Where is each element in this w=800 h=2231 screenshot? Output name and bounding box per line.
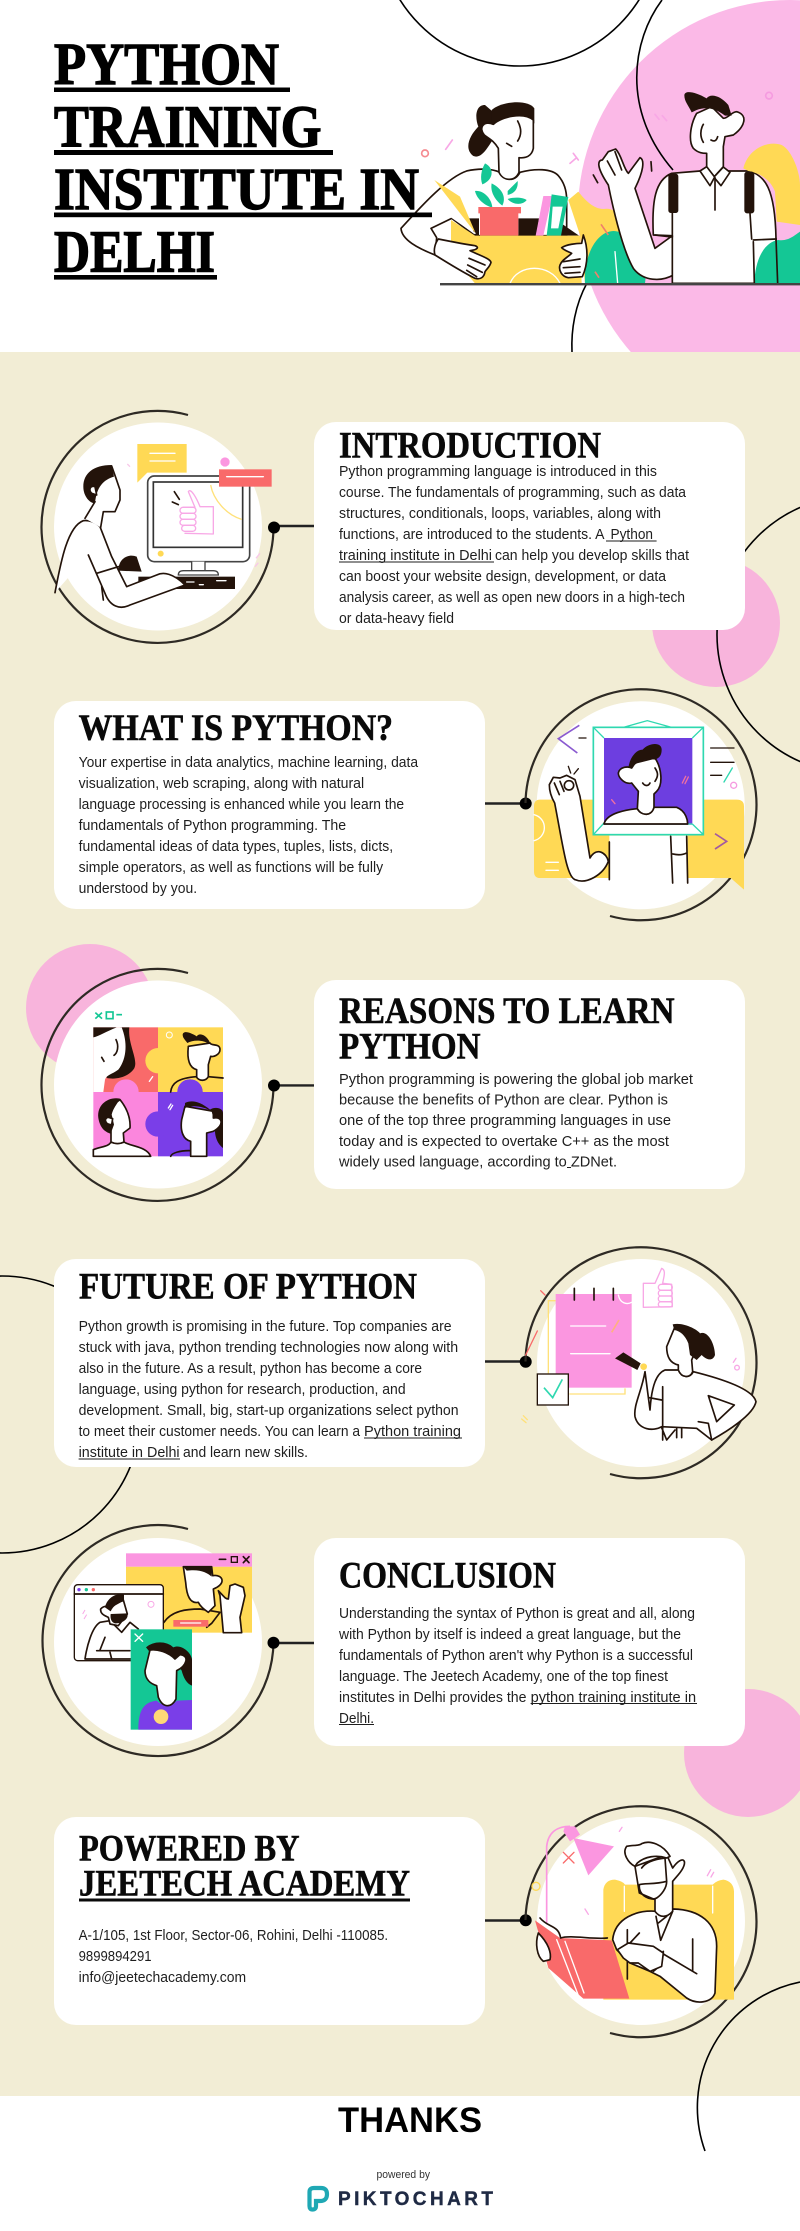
- body text: conclusion: python training institute in: [531, 1689, 696, 1706]
- yellow speech bubble: [534, 800, 744, 890]
- floor lamp: [547, 1826, 614, 1923]
- chevrons: [558, 725, 579, 753]
- body text: reasons: because the benefits of Python are clear. Python is: [339, 1092, 668, 1109]
- body text: reasons: [338, 1071, 694, 1170]
- picture frame: [593, 721, 703, 835]
- green video card: [131, 1629, 192, 1730]
- man hair: [628, 744, 662, 768]
- hand and pen: [617, 1943, 663, 1971]
- body text: future: Python growth is promising in the future. Top companies are: [79, 1318, 452, 1335]
- alert tag: [219, 469, 272, 487]
- video call drawing: [74, 1553, 252, 1730]
- contact details: [79, 1927, 388, 1986]
- face bottom left: [93, 1098, 151, 1156]
- body text: future: Python training: [364, 1423, 461, 1440]
- left hand: [537, 1933, 550, 1961]
- body text: conclusion: with Python by itself is indeed a great language, but the: [338, 1626, 681, 1643]
- body text: reasons: one of the top three programming languages in use: [339, 1112, 671, 1129]
- woman with notepad drawing: [522, 1268, 756, 1440]
- body text: future: also in the future. As a result, python has become a core: [79, 1360, 422, 1377]
- man torso: [653, 171, 778, 283]
- section: powered by: [54, 1806, 756, 2037]
- illustration circle: man reading in chair: [526, 1806, 756, 2037]
- card: conclusion: [314, 1538, 745, 1746]
- body text: what is python: visualization, web scraping, along with natural: [79, 775, 364, 792]
- body text: conclusion: Delhi.: [339, 1710, 374, 1727]
- heading: powered by jeetech academy: JEETECH ACADEMY: [79, 1864, 410, 1905]
- footer: powered by piktochart: [310, 2169, 493, 2210]
- yellow bush and green bush: [568, 192, 646, 283]
- mouse: [118, 556, 142, 572]
- body text: reasons: Python programming is powering the global job market: [339, 1071, 694, 1088]
- man torso: [604, 807, 688, 824]
- side marks: [568, 738, 737, 804]
- connector: [485, 1356, 532, 1368]
- woman in green card: [138, 1642, 192, 1730]
- thumbs up icon: [172, 491, 213, 534]
- reading man drawing: [532, 1826, 734, 2002]
- illustration circle: woman writing on notepad: [522, 1247, 756, 1478]
- body text: conclusion: [338, 1605, 697, 1727]
- title: TRAINING: [54, 94, 322, 160]
- bearded man: [85, 1594, 138, 1659]
- card: reasons: [314, 980, 745, 1189]
- face top right: [149, 1032, 223, 1105]
- man head: [618, 758, 661, 814]
- heading: powered by jeetech academy: [79, 1829, 410, 1905]
- contact details: A-1/105, 1st Floor, Sector-06, Rohini, Delhi -110085.: [79, 1927, 388, 1944]
- ground line: [440, 283, 800, 285]
- powered by text: powered by: [376, 2169, 430, 2181]
- section: future of python: [54, 1247, 756, 1478]
- woman hair: [468, 102, 534, 157]
- man hair: [625, 1842, 670, 1866]
- man collar: [700, 167, 730, 186]
- monitor: [148, 476, 250, 575]
- body text: future: institute in Delhi: [79, 1444, 180, 1461]
- body text: introduction: structures, conditionals, loops, variables, along with: [339, 505, 661, 522]
- woman hair: [673, 1324, 715, 1360]
- plant leaves: [475, 163, 527, 208]
- title: INSTITUTE IN: [54, 156, 419, 222]
- heading: introduction: INTRODUCTION: [339, 426, 601, 466]
- body text: what is python: fundamentals of Python programming. The: [79, 817, 346, 834]
- face top left: [93, 1027, 135, 1092]
- heading: what is python: WHAT IS PYTHON?: [79, 708, 393, 749]
- box interior: [469, 218, 579, 236]
- marker: [615, 1352, 647, 1370]
- heading: reasons: PYTHON: [339, 1027, 481, 1068]
- yellow window: [126, 1553, 252, 1633]
- connector: [485, 1914, 532, 1926]
- header outline arcs: [378, 0, 673, 352]
- heading: reasons: [339, 991, 675, 1068]
- body text: conclusion: fundamentals of Python aren't why Python is a successful: [339, 1647, 693, 1664]
- body text: introduction: [339, 463, 690, 627]
- body text: conclusion: Understanding the syntax of Python is great and all, along: [339, 1605, 695, 1622]
- illustration circle: video call windows: [43, 1525, 274, 1756]
- computer user drawing: [55, 444, 272, 607]
- woman head: [667, 1327, 697, 1376]
- title: DELHI: [54, 219, 215, 285]
- body text: what is python: [79, 754, 419, 897]
- body text: future: to meet their customer needs. You can learn a: [79, 1423, 361, 1440]
- man head: [85, 466, 120, 527]
- card: future: [54, 1259, 485, 1467]
- woman torso: [401, 169, 567, 255]
- connector: [268, 1080, 314, 1092]
- body text: introduction: can boost your website design, development, or data: [339, 568, 667, 585]
- title: [54, 31, 432, 285]
- man head: [635, 1855, 684, 1916]
- red book: [535, 1918, 629, 1999]
- man head: [690, 107, 744, 177]
- woman head: [482, 116, 533, 179]
- piktochart logo: [310, 2188, 327, 2210]
- illustration circle: man at computer: [42, 411, 274, 643]
- speech bubble: [137, 444, 187, 483]
- body text: introduction: training institute in Delhi: [339, 547, 492, 564]
- body text: conclusion: language. The Jeetech Academy, one of the top finest: [339, 1668, 669, 1685]
- body text: introduction: course. The fundamentals of programming, such as data: [339, 484, 687, 501]
- header pink circle: [578, 0, 800, 424]
- puzzle tiles: [93, 1027, 223, 1156]
- body text: future: development. Small, big, start-up organizations select python: [79, 1402, 459, 1419]
- side marks: [532, 1827, 714, 1914]
- header background: [0, 0, 800, 352]
- right yellow and green bushes: [743, 144, 800, 283]
- check box: [537, 1374, 568, 1405]
- heading: reasons: REASONS TO LEARN: [339, 991, 675, 1032]
- section: conclusion: [43, 1525, 745, 1756]
- decorative outline arcs: [0, 496, 800, 2151]
- window icons: [95, 1012, 122, 1019]
- body text: future: [79, 1318, 462, 1461]
- body text: introduction: or data-heavy field: [339, 610, 454, 627]
- piktochart wordmark: PIKTOCHART: [338, 2189, 493, 2210]
- decorative pink circles: [26, 559, 800, 1817]
- woman hands: [434, 235, 587, 279]
- connector: [485, 798, 532, 810]
- body text: what is python: understood by you.: [79, 880, 197, 897]
- backpack straps: [655, 172, 776, 240]
- closing heading: THANKS: [338, 2101, 482, 2140]
- heading: conclusion: CONCLUSION: [339, 1556, 556, 1597]
- body text: reasons: today and is expected to overtake C++ as the most: [339, 1133, 670, 1150]
- man body: [55, 521, 185, 607]
- section: reasons to learn python: [42, 969, 745, 1201]
- side marks: [522, 1291, 739, 1423]
- flower pot: [478, 207, 521, 236]
- illustration circle: four faces puzzle: [42, 969, 274, 1201]
- section: introduction: [42, 411, 745, 643]
- framed man drawing: [534, 721, 744, 890]
- connector: [268, 1637, 314, 1649]
- illustration circle: man in picture frame: [526, 689, 756, 920]
- body text: what is python: fundamental ideas of data types, tuples, lists, dicts,: [79, 838, 393, 855]
- connector: [268, 522, 314, 534]
- cardboard box: [434, 180, 582, 283]
- body text: introduction: functions, are introduced to the students. A: [339, 526, 604, 543]
- contact details: info@jeetechacademy.com: [79, 1969, 246, 1986]
- heading: future: FUTURE OF PYTHON: [79, 1267, 417, 1308]
- title: PYTHON: [54, 31, 279, 97]
- hand making OK sign: [549, 775, 608, 881]
- card: what is python: [54, 701, 485, 909]
- body text: conclusion: institutes in Delhi provides the: [339, 1689, 526, 1706]
- card: introduction: [314, 422, 745, 630]
- body text: future: and learn new skills.: [183, 1444, 308, 1461]
- woman body: [635, 1370, 756, 1440]
- body text: introduction: Python: [610, 526, 653, 543]
- illustration: woman with box and waving man: [401, 92, 800, 283]
- man torso: [613, 1909, 717, 2002]
- body text: introduction: Python programming language is introduced in this: [339, 463, 657, 480]
- body text: introduction: can help you develop skills that: [495, 547, 690, 564]
- armchair: [603, 1880, 734, 2000]
- thumbs up icon: [643, 1268, 672, 1307]
- man in yellow window: [164, 1567, 245, 1633]
- face bottom right: [168, 1101, 223, 1156]
- body text: what is python: Your expertise in data analytics, machine learning, data: [79, 754, 419, 771]
- body text: what is python: simple operators, as well as functions will be fully: [79, 859, 384, 876]
- keyboard: [138, 577, 235, 589]
- body text: future: stuck with java, python trending technologies now along with: [79, 1339, 458, 1356]
- glasses and beard: [639, 1858, 667, 1899]
- body text: introduction: analysis career, as well as open new doors in a high-tech: [339, 589, 685, 606]
- man hair: [83, 465, 114, 503]
- header decorative marks: [422, 92, 772, 183]
- white window: [74, 1585, 163, 1661]
- card: powered by: [54, 1817, 485, 2025]
- body text: reasons: widely used language, according to ZDNet.: [338, 1153, 617, 1170]
- puzzle drawing: [93, 1012, 223, 1156]
- notepad: [548, 1288, 632, 1394]
- contact details: 9899894291: [79, 1948, 152, 1965]
- body text: what is python: language processing is enhanced while you learn the: [79, 796, 404, 813]
- heading: powered by jeetech academy: POWERED BY: [79, 1829, 300, 1870]
- body text: future: language, using python for research, production, and: [79, 1381, 406, 1398]
- man hair: [684, 92, 732, 116]
- cream background band: [0, 352, 800, 2096]
- section: what is python: [54, 689, 756, 920]
- books: [536, 194, 568, 236]
- man arm: [599, 149, 673, 279]
